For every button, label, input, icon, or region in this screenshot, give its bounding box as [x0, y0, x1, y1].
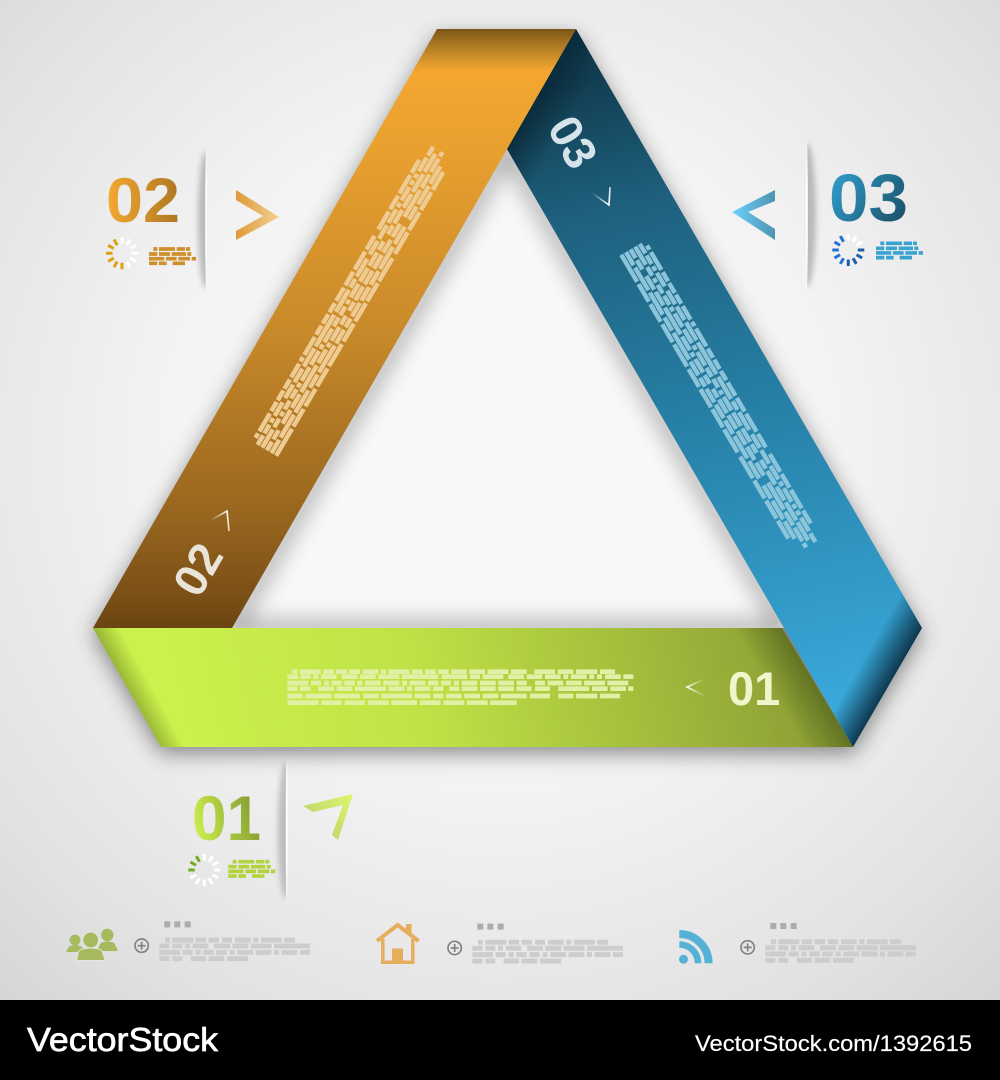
icon: house — [377, 924, 418, 962]
small text 03 — [876, 243, 923, 258]
footer item: people — [66, 924, 310, 960]
icon: rss — [679, 934, 709, 964]
callout 01 — [188, 762, 353, 898]
icon: people — [66, 929, 118, 960]
brand name: VectorStock — [27, 1021, 219, 1058]
number 01: 01 — [192, 784, 261, 854]
callout 02 — [106, 145, 279, 295]
triangle drop shadow — [93, 37, 922, 753]
spinner 01 — [188, 854, 220, 886]
image url: VectorStock.com/1392615 — [695, 1031, 972, 1056]
orange ribbon text block — [253, 144, 452, 456]
orange ribbon number: 02 — [163, 534, 233, 605]
green ribbon chevron — [687, 679, 705, 696]
footer text: rss — [741, 926, 916, 960]
arrow 01 — [303, 794, 353, 840]
footer band — [0, 1000, 1000, 1080]
ribbon: blue segment 03 — [507, 29, 922, 747]
arrow 02 — [236, 190, 279, 240]
footer text: people — [135, 924, 310, 959]
blue ribbon chevron — [592, 187, 610, 205]
crease divider 01 — [276, 762, 288, 898]
footer item: rss — [679, 926, 916, 964]
orange ribbon chevron — [211, 511, 229, 531]
spinner 02 — [106, 237, 138, 269]
green ribbon number: 01 — [728, 662, 780, 715]
crease divider 02 — [195, 152, 207, 289]
arrow 03 — [732, 190, 775, 240]
ribbon: green segment 01 — [93, 628, 853, 747]
small text 02 — [149, 249, 196, 263]
spinner 03 — [832, 234, 864, 266]
green ribbon text block — [287, 672, 633, 703]
blue ribbon number: 03 — [538, 107, 608, 177]
number 02: 02 — [106, 166, 180, 236]
number 03: 03 — [829, 161, 908, 236]
small text 01 — [228, 862, 275, 876]
blue ribbon text block — [621, 241, 820, 553]
footer item: home — [377, 924, 623, 962]
crease divider 03 — [806, 142, 819, 288]
ribbon: orange segment 02 — [93, 29, 576, 628]
callout 03 — [732, 135, 923, 295]
inner shadow cast by bands — [232, 150, 784, 628]
footer text: home — [448, 927, 623, 961]
